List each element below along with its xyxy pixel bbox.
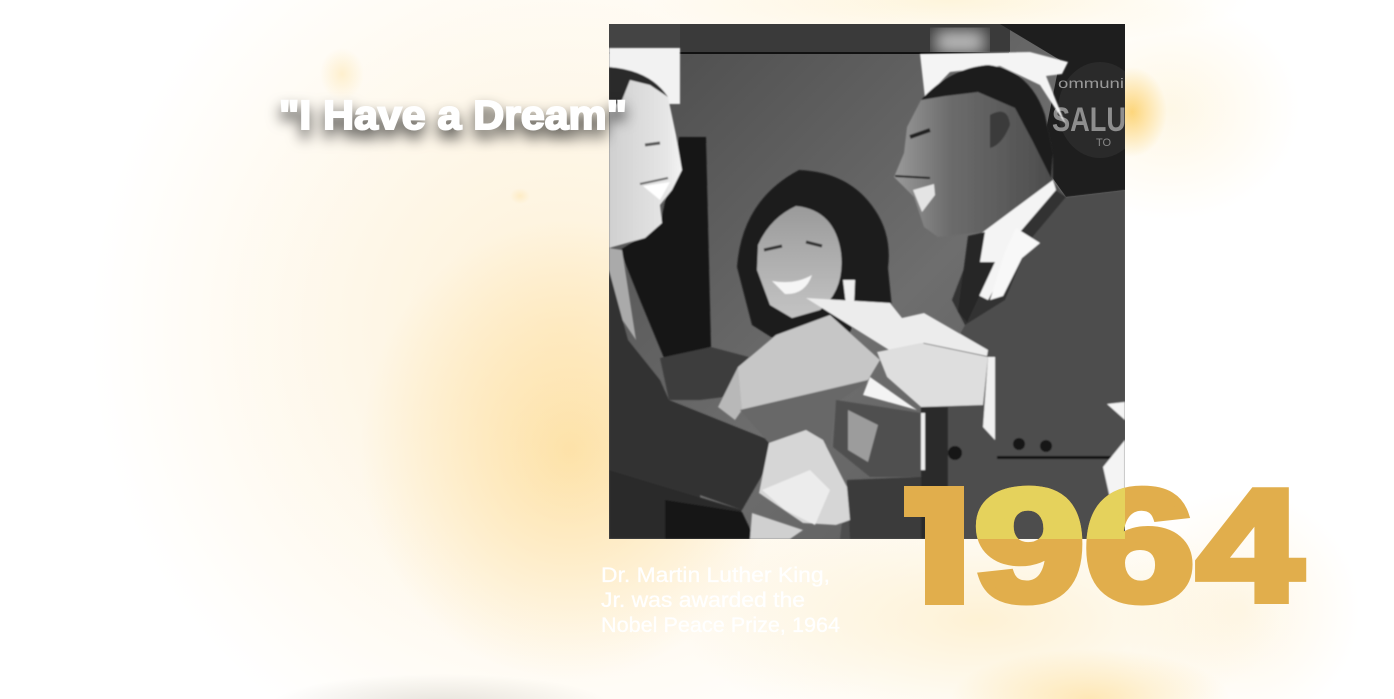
dark poster behind Dr. King: TO xyxy=(1096,137,1112,149)
photo wall xyxy=(609,24,1125,539)
digit 9: 9 xyxy=(974,458,1085,634)
digit 6: 6 xyxy=(1084,458,1195,634)
caption: Nobel Peace Prize, 1964 xyxy=(601,613,840,637)
Dr. King's raised hand and cuff xyxy=(877,343,1125,505)
photo overlap tint on year xyxy=(976,486,1125,539)
papers xyxy=(806,298,988,410)
dark poster behind Dr. King: SALU xyxy=(1052,101,1126,139)
digit 4: 4 xyxy=(1197,457,1302,633)
photo overlap tint on year: 9 xyxy=(974,458,1085,634)
dark panel behind left man xyxy=(620,137,711,358)
photo: Dr. King, Coretta Scott King and a man shaking hands xyxy=(609,24,1142,539)
title: "I Have a Dream" xyxy=(279,92,627,138)
digit 1 xyxy=(904,486,964,605)
shirt, tie and flower xyxy=(958,180,1056,322)
Dr. King's head xyxy=(894,65,1053,237)
photo overlap tint on year: 6 xyxy=(1084,458,1195,634)
Coretta Scott King xyxy=(718,170,892,445)
dark poster behind Dr. King xyxy=(1000,24,1125,197)
Dr. King's suit xyxy=(840,182,1125,539)
left man xyxy=(609,67,771,539)
handshake xyxy=(750,430,850,539)
caption xyxy=(601,563,840,637)
white retouched areas around heads xyxy=(609,48,680,104)
digit 1: 1 xyxy=(895,458,983,634)
purse xyxy=(833,400,925,477)
caption: Dr. Martin Luther King, xyxy=(601,563,830,587)
year 1964 xyxy=(904,486,1306,606)
caption: Jr. was awarded the xyxy=(601,588,805,612)
wall shadow by woman xyxy=(660,347,760,400)
dark poster behind Dr. King: ommuni xyxy=(1058,75,1124,91)
